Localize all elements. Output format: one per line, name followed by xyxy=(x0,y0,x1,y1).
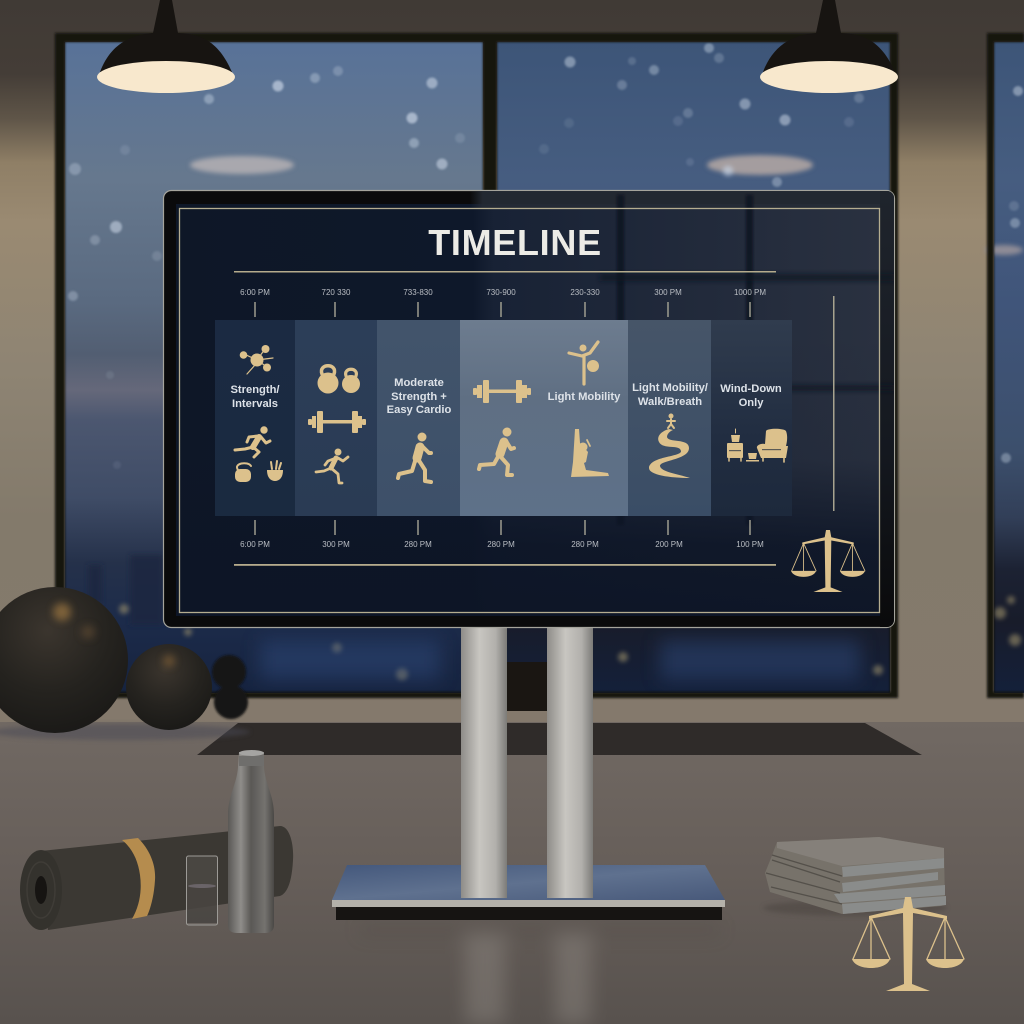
vertical axis line xyxy=(833,296,834,511)
icon: person on winding path xyxy=(649,414,690,478)
label: moderate strength easy cardio: Strength + xyxy=(391,391,447,403)
top time labels xyxy=(240,288,766,297)
exercise mat on the floor xyxy=(197,723,922,755)
monitor stand xyxy=(332,620,725,920)
icon: kettlebell xyxy=(235,463,251,482)
monitor xyxy=(164,190,894,628)
bokeh lights in window xyxy=(68,43,1023,469)
monitor frame xyxy=(164,190,894,628)
label: strength intervals: Intervals xyxy=(232,398,278,410)
top time labels: 1000 PM xyxy=(734,288,766,297)
window: right pane xyxy=(994,42,1024,693)
title: TIMELINE xyxy=(428,222,602,263)
top time labels: 733-830 xyxy=(403,288,433,297)
floor xyxy=(0,722,1024,1024)
city lights below the skyline xyxy=(119,596,1021,680)
column: peak strength and mobility xyxy=(460,320,628,516)
bottom time labels: 280 PM xyxy=(404,540,432,549)
top rule xyxy=(234,271,776,272)
icon: armchair xyxy=(757,429,788,462)
label: light mobility walk breath: Light Mobility/ xyxy=(632,382,708,394)
label: strength intervals: Strength/ xyxy=(230,384,280,396)
bottom time labels: 200 PM xyxy=(655,540,683,549)
bottom time labels xyxy=(240,540,764,549)
lamp: left xyxy=(97,0,235,93)
bottom ticks xyxy=(255,520,750,535)
dark cabinet between the posts xyxy=(507,662,547,711)
yoga mat roll xyxy=(20,826,293,930)
icon: side table with plant xyxy=(727,429,743,461)
column: kettlebells xyxy=(295,320,377,516)
window frame xyxy=(55,33,1024,698)
icon: molecule xyxy=(240,345,273,374)
label: moderate strength easy cardio: Moderate xyxy=(394,377,444,389)
inner gold border xyxy=(180,208,880,612)
icon: barbell xyxy=(308,411,366,433)
bottom time labels: 280 PM xyxy=(487,540,515,549)
icon: kettlebells xyxy=(318,366,360,394)
label: wind-down only: Only xyxy=(739,397,764,409)
window: left pane xyxy=(65,42,483,693)
icon: runner xyxy=(316,448,348,483)
icon: coffee cup xyxy=(746,453,759,462)
icon: runner xyxy=(398,432,431,482)
top time labels: 720 330 xyxy=(322,288,351,297)
label: light mobility: Light Mobility xyxy=(548,391,621,403)
bottom time labels: 280 PM xyxy=(571,540,599,549)
icon: scales of justice on floor xyxy=(852,897,964,991)
icon: sprinter xyxy=(235,426,270,457)
wall xyxy=(0,0,1024,740)
column: wind down xyxy=(711,320,792,516)
column: moderate strength xyxy=(377,320,460,516)
window: centre pane xyxy=(497,42,890,693)
exercise balls xyxy=(0,587,250,740)
icon: dancer xyxy=(569,342,599,384)
lamp: right xyxy=(760,0,898,93)
bottom time labels: 100 PM xyxy=(736,540,764,549)
water bottle xyxy=(228,750,274,933)
gold band xyxy=(122,838,155,919)
icon: scales of justice on screen xyxy=(791,530,865,592)
distant buildings xyxy=(88,555,163,625)
bottom rule xyxy=(234,564,776,566)
label: light mobility walk breath: Walk/Breath xyxy=(638,396,702,408)
top time labels: 300 PM xyxy=(654,288,682,297)
blue haze in lower window xyxy=(260,640,860,680)
top time labels: 230-330 xyxy=(570,288,600,297)
label: wind-down only: Wind-Down xyxy=(720,383,782,395)
floor reflections xyxy=(360,925,720,1024)
top ticks xyxy=(255,302,750,317)
column: strength intervals xyxy=(215,320,295,516)
label: moderate strength easy cardio: Easy Cardio xyxy=(387,404,451,416)
lamp reflections in window xyxy=(190,155,1023,255)
bottom time labels: 6:00 PM xyxy=(240,540,270,549)
glass of water xyxy=(186,856,218,925)
screen reflections xyxy=(176,191,894,627)
icon: basket xyxy=(267,461,283,481)
column: light mobility walk breath xyxy=(628,320,711,516)
icon: runner xyxy=(479,428,514,475)
icon: barbell xyxy=(473,380,531,403)
bottom time labels: 300 PM xyxy=(322,540,350,549)
stacked towels xyxy=(763,837,947,916)
top time labels: 6:00 PM xyxy=(240,288,270,297)
top time labels: 730-900 xyxy=(486,288,516,297)
icon: seated stretch xyxy=(571,429,609,477)
